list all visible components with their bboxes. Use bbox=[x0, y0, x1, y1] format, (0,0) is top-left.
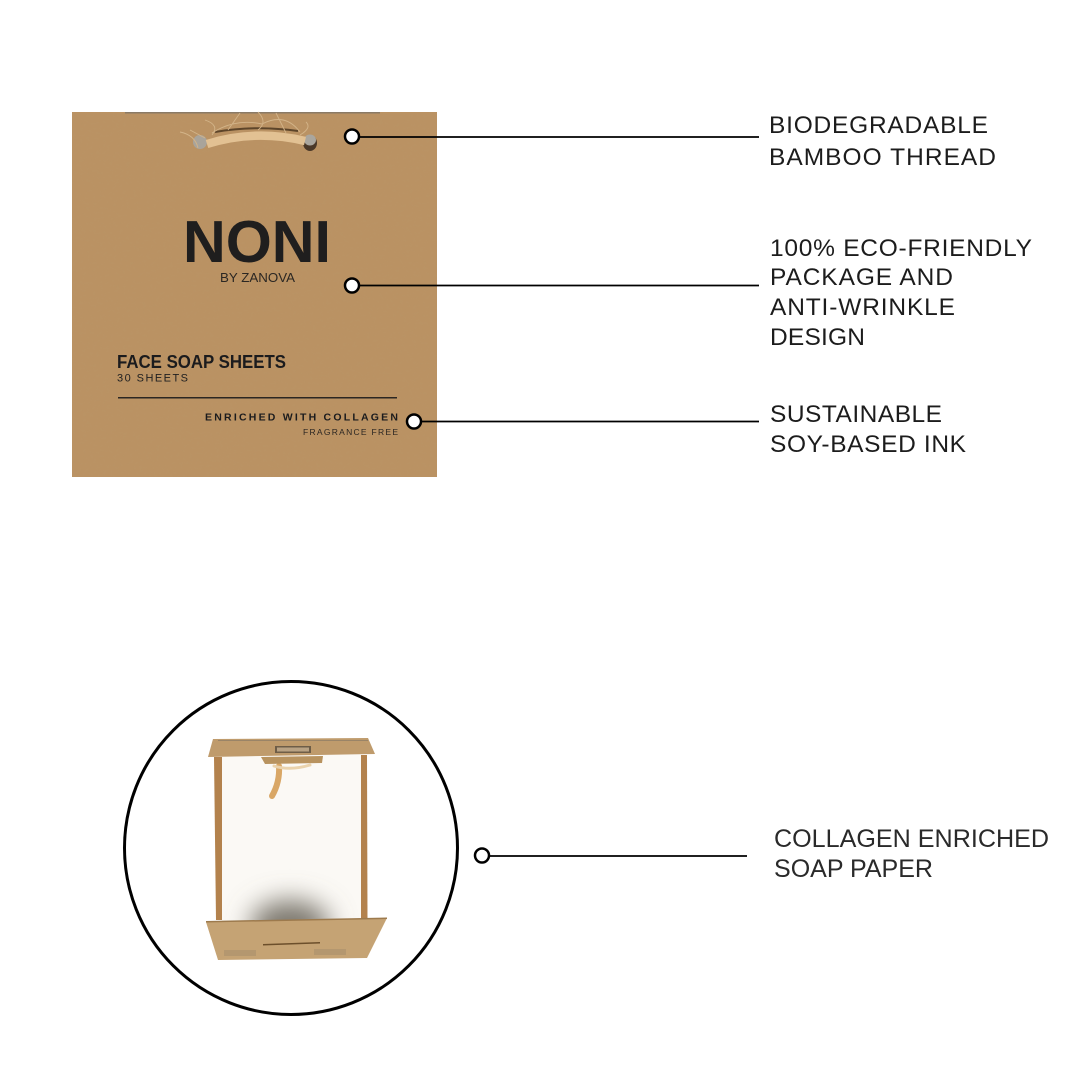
soap sheet bbox=[222, 755, 361, 920]
callout text: biodegradable bamboo thread bbox=[769, 112, 996, 171]
callout text: eco-friendly package bbox=[770, 235, 1032, 351]
fragrance free: FRAGRANCE FREE bbox=[303, 427, 398, 437]
bottom flap bbox=[206, 918, 387, 960]
callout text: eco-friendly package: DESIGN bbox=[770, 324, 865, 351]
callout text: soy-based ink bbox=[770, 401, 967, 458]
enriched with collagen: ENRICHED WITH COLLAGEN bbox=[205, 412, 398, 424]
callout: soap paper connector bbox=[475, 848, 747, 862]
panel: kraft package bbox=[72, 112, 437, 477]
icon: thread on sheet bbox=[272, 765, 310, 796]
top flap bbox=[208, 738, 375, 764]
callout: soy-based ink connector bbox=[407, 414, 759, 428]
callout: eco-friendly package connector bbox=[345, 278, 759, 292]
side strip right bbox=[361, 755, 368, 919]
icon: bamboo thread through two holes bbox=[180, 112, 317, 151]
callout text: biodegradable bamboo thread: BIODEGRADABLE bbox=[769, 112, 988, 139]
sheet count: 30 SHEETS bbox=[117, 372, 188, 384]
side strip left bbox=[214, 757, 222, 920]
callout: bamboo thread connector bbox=[345, 130, 759, 144]
callout text: collagen enriched soap paper: SOAP PAPER bbox=[774, 855, 933, 883]
callout text: eco-friendly package: PACKAGE AND bbox=[770, 264, 953, 291]
clipped print at top edge bbox=[125, 112, 380, 114]
callout text: soy-based ink: SOY-BASED INK bbox=[770, 431, 967, 458]
callout text: soy-based ink: SUSTAINABLE bbox=[770, 401, 942, 428]
callout text: biodegradable bamboo thread: BAMBOO THREAD bbox=[769, 144, 996, 171]
callout text: eco-friendly package: ANTI-WRINKLE bbox=[770, 294, 955, 321]
brand logo: NONI bbox=[183, 209, 331, 275]
callout text: collagen enriched soap paper bbox=[774, 825, 1049, 883]
brand subtitle: BY ZANOVA bbox=[220, 270, 295, 285]
product name: FACE SOAP SHEETS bbox=[117, 352, 286, 372]
panel: circular product view bbox=[124, 682, 458, 1014]
callout text: eco-friendly package: 100% ECO-FRIENDLY bbox=[770, 235, 1032, 262]
callout text: collagen enriched soap paper: COLLAGEN ENRICHED bbox=[774, 825, 1049, 853]
infographic canvas bbox=[72, 112, 1048, 1016]
